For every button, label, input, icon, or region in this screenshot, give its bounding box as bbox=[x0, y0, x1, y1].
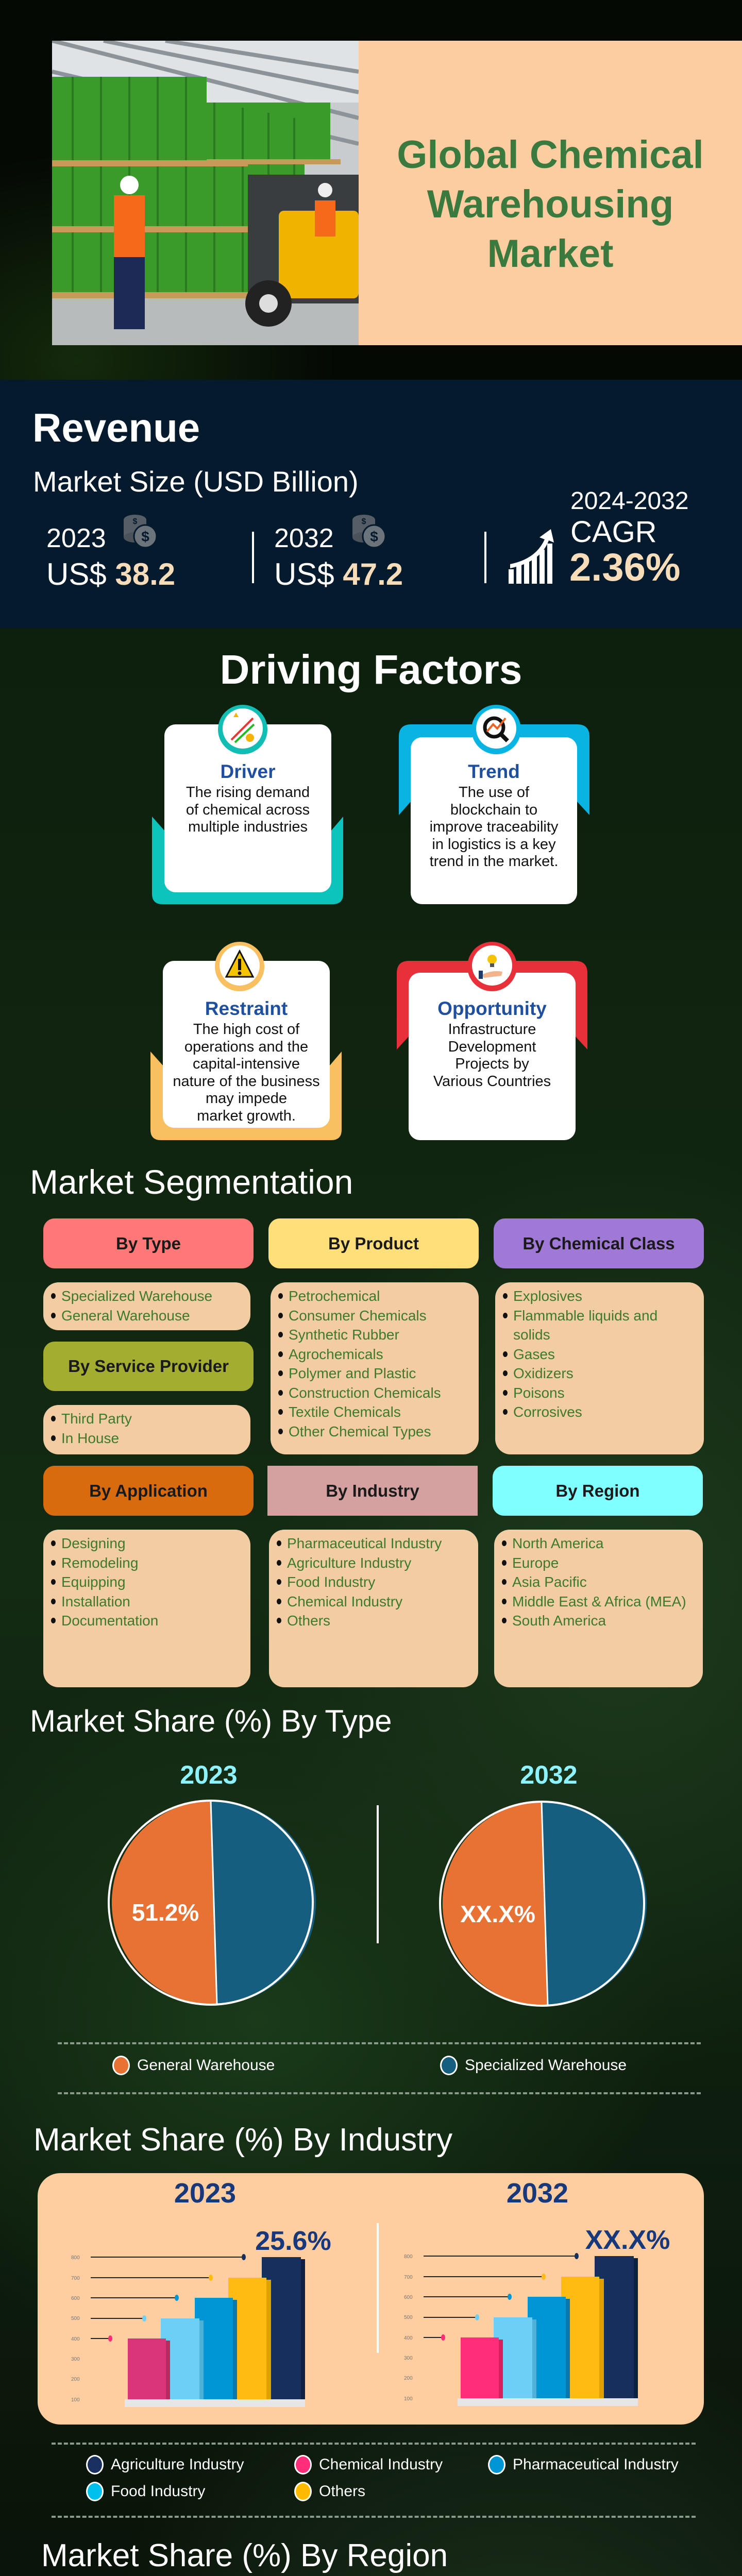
heading: market share by type: Market Share (%) By Type bbox=[30, 1704, 392, 1738]
list: industry bbox=[269, 1530, 478, 1687]
card: trend: trend in the market. bbox=[430, 853, 558, 870]
revenue section bbox=[0, 380, 742, 628]
card: opportunity bbox=[409, 973, 576, 1140]
card: opportunity: Various Countries bbox=[433, 1073, 551, 1089]
card: restraint: operations and the bbox=[184, 1039, 308, 1055]
panel: bar charts by industry: 700 bbox=[71, 2276, 80, 2281]
card: restraint: Restraint bbox=[205, 998, 288, 1019]
chart: pie charts by type: 51.2% bbox=[132, 1899, 199, 1926]
panel: bar charts by industry: 100 bbox=[404, 2396, 413, 2402]
list: application bbox=[43, 1530, 250, 1687]
list: application: Equipping bbox=[61, 1574, 126, 1590]
panel: bar charts by industry: 200 bbox=[404, 2376, 413, 2381]
card: trend: The use of bbox=[459, 784, 529, 801]
icon: coins: $ bbox=[141, 529, 149, 545]
panel: segmentation bbox=[43, 1218, 704, 1687]
list: application: Designing bbox=[61, 1535, 126, 1551]
stat 2023 bbox=[46, 515, 175, 591]
driving factors heading: Driving Factors bbox=[220, 647, 522, 692]
title: Warehousing bbox=[427, 182, 673, 226]
card: driver: The rising demand bbox=[186, 784, 310, 801]
list: product: Polymer and Plastic bbox=[289, 1365, 416, 1381]
card: restraint: may impede bbox=[206, 1090, 287, 1107]
list: chemical class: Gases bbox=[513, 1346, 555, 1362]
card: restraint: market growth. bbox=[197, 1108, 296, 1124]
panel: bar charts by industry: 600 bbox=[404, 2295, 413, 2300]
list: region bbox=[494, 1530, 703, 1687]
panel: bar charts by industry: 500 bbox=[71, 2316, 80, 2321]
icon: coins: $ bbox=[370, 529, 378, 545]
heading: market segmentation: Market Segmentation bbox=[30, 1163, 353, 1201]
title: Market bbox=[487, 232, 613, 276]
header: by service provider bbox=[43, 1342, 254, 1391]
header: by product bbox=[268, 1218, 479, 1268]
heading: market share by industry: Market Share (%) By Industry bbox=[33, 2122, 452, 2158]
list: product: Other Chemical Types bbox=[289, 1423, 431, 1439]
list: type bbox=[43, 1282, 250, 1330]
panel: bar charts by industry bbox=[38, 2173, 704, 2425]
header: by type bbox=[43, 1218, 254, 1268]
panel: bar charts by industry: 2023 bbox=[174, 2178, 236, 2209]
heading: market share by region: Market Share (%) By Region bbox=[41, 2538, 448, 2573]
list: product: Consumer Chemicals bbox=[289, 1308, 427, 1323]
list: region: Middle East & Africa (MEA) bbox=[512, 1593, 686, 1609]
card: trend: Trend bbox=[468, 761, 520, 782]
list: type: Specialized Warehouse bbox=[61, 1288, 212, 1304]
list: chemical class: Flammable liquids and bbox=[513, 1308, 657, 1323]
chart: pie charts by type: 2023 bbox=[180, 1760, 238, 1789]
legend: type: Specialized Warehouse bbox=[465, 2057, 627, 2074]
list: chemical class: solids bbox=[513, 1327, 550, 1343]
list: region: North America bbox=[512, 1535, 603, 1551]
legend: industry: Chemical Industry bbox=[319, 2456, 443, 2473]
card: trend: blockchain to bbox=[450, 802, 537, 818]
header: by chemical class bbox=[494, 1218, 704, 1268]
list: industry: Others bbox=[287, 1613, 330, 1629]
stat 2032: 2032 bbox=[274, 523, 334, 553]
revenue section: CAGR bbox=[570, 515, 657, 549]
panel: bar charts by industry: 700 bbox=[404, 2275, 413, 2280]
panel: bar charts by industry: 300 bbox=[71, 2357, 80, 2362]
list: product bbox=[271, 1282, 479, 1454]
card: driver: of chemical across bbox=[186, 802, 310, 818]
legend: industry: Food Industry bbox=[111, 2483, 205, 2500]
list: industry: Food Industry bbox=[287, 1574, 375, 1590]
list: region: Europe bbox=[512, 1555, 559, 1570]
card: trend: improve traceability bbox=[430, 819, 558, 835]
card: trend: in logistics is a key bbox=[432, 836, 556, 852]
legend: industry bbox=[86, 2455, 679, 2501]
header: by product: By Product bbox=[328, 1233, 419, 1253]
panel: bar charts by industry: 500 bbox=[404, 2315, 413, 2320]
revenue heading: Revenue bbox=[32, 405, 200, 450]
divider bbox=[484, 532, 486, 583]
panel: bar charts by industry: 800 bbox=[404, 2254, 413, 2260]
list: application: Installation bbox=[61, 1593, 130, 1609]
header: by industry bbox=[267, 1466, 478, 1516]
stat 2023: US$ 38.2 bbox=[46, 557, 175, 591]
card: opportunity: Projects by bbox=[455, 1056, 529, 1072]
panel: bar charts by industry: 600 bbox=[71, 2296, 80, 2301]
header: by chemical class: By Chemical Class bbox=[522, 1233, 675, 1253]
title bbox=[397, 133, 704, 276]
revenue section: 2.36% bbox=[569, 546, 680, 589]
header background bbox=[0, 0, 742, 380]
panel: bar charts by industry: 100 bbox=[71, 2397, 80, 2403]
list: chemical class bbox=[495, 1282, 704, 1454]
stat 2023: 2023 bbox=[46, 523, 106, 553]
list: service provider bbox=[43, 1405, 250, 1454]
header photo: warehouse with drums and forklift bbox=[52, 41, 359, 345]
list: product: Synthetic Rubber bbox=[289, 1327, 399, 1343]
legend: type: General Warehouse bbox=[137, 2057, 275, 2074]
list: application: Documentation bbox=[61, 1613, 158, 1629]
icon: opportunity bbox=[468, 942, 516, 991]
icon: coins bbox=[352, 515, 384, 547]
card: opportunity: Opportunity bbox=[437, 998, 547, 1019]
panel: bar charts by industry: 200 bbox=[71, 2377, 80, 2382]
legend: industry: Others bbox=[319, 2483, 365, 2500]
icon: growth arrow bbox=[509, 529, 554, 584]
header: by industry: By Industry bbox=[326, 1481, 419, 1500]
card: restraint: nature of the business bbox=[173, 1073, 320, 1089]
legend: industry: Pharmaceutical Industry bbox=[513, 2456, 679, 2473]
header: by type: By Type bbox=[116, 1233, 181, 1253]
list: industry: Pharmaceutical Industry bbox=[287, 1535, 442, 1551]
panel: bar charts by industry: 25.6% bbox=[255, 2226, 331, 2256]
icon: restraint warning bbox=[215, 942, 264, 991]
icon: coins: $ bbox=[133, 517, 138, 526]
chart: pie charts by type: 2032 bbox=[520, 1760, 578, 1789]
card: opportunity: Development bbox=[448, 1039, 536, 1055]
divider bbox=[252, 532, 254, 583]
list: industry: Chemical Industry bbox=[287, 1593, 402, 1609]
legend: industry: Agriculture Industry bbox=[111, 2456, 244, 2473]
list: application: Remodeling bbox=[61, 1555, 138, 1570]
list: chemical class: Poisons bbox=[513, 1385, 565, 1400]
panel: driving factors card frames bbox=[150, 724, 589, 1140]
icon: trend bbox=[472, 705, 520, 754]
panel: bar charts by industry: XX.X% bbox=[585, 2225, 670, 2255]
card: restraint bbox=[163, 961, 330, 1128]
stat 2032: US$ 47.2 bbox=[274, 557, 403, 591]
panel: bar charts by industry: 800 bbox=[71, 2255, 80, 2261]
CAGR: 2024-2032 bbox=[570, 487, 689, 515]
title: Global Chemical bbox=[397, 133, 704, 177]
list: service provider: In House bbox=[61, 1430, 119, 1446]
header: by region: By Region bbox=[555, 1481, 640, 1500]
icon: coins bbox=[124, 515, 156, 547]
list: region: Asia Pacific bbox=[512, 1574, 587, 1590]
header: by application bbox=[43, 1466, 254, 1516]
card: restraint: The high cost of bbox=[193, 1021, 299, 1038]
card: driver bbox=[164, 724, 331, 892]
list: region: South America bbox=[512, 1613, 606, 1629]
market size label: Market Size (USD Billion) bbox=[33, 465, 359, 498]
panel: bar charts by industry: 400 bbox=[404, 2335, 413, 2341]
card: restraint: capital-intensive bbox=[193, 1056, 300, 1072]
list: product: Construction Chemicals bbox=[289, 1385, 441, 1400]
legend: type bbox=[112, 2056, 627, 2075]
header: by service provider: By Service Provider bbox=[68, 1357, 229, 1376]
icon: driver bbox=[218, 705, 267, 754]
stat 2032 bbox=[274, 515, 403, 591]
card: trend bbox=[411, 737, 577, 904]
card: opportunity: Infrastructure bbox=[448, 1021, 536, 1038]
icon: coins: $ bbox=[362, 517, 366, 526]
list: industry: Agriculture Industry bbox=[287, 1555, 411, 1570]
background: dark green body gradient bbox=[0, 628, 742, 2576]
panel: bar charts by industry: 400 bbox=[71, 2336, 80, 2342]
panel: bar charts by industry: 2032 bbox=[507, 2178, 568, 2209]
header: by application: By Application bbox=[89, 1481, 208, 1500]
header: by region bbox=[493, 1466, 703, 1516]
list: chemical class: Explosives bbox=[513, 1288, 582, 1304]
chart: pie charts by type bbox=[108, 1760, 647, 2007]
list: product: Petrochemical bbox=[289, 1288, 380, 1304]
list: product: Textile Chemicals bbox=[289, 1404, 401, 1420]
card: driver: multiple industries bbox=[188, 819, 308, 835]
list: chemical class: Oxidizers bbox=[513, 1365, 574, 1381]
chart: pie charts by type: XX.X% bbox=[460, 1901, 535, 1927]
list: service provider: Third Party bbox=[61, 1411, 132, 1427]
panel: bar charts by industry: 300 bbox=[404, 2355, 413, 2361]
list: type: General Warehouse bbox=[61, 1308, 190, 1323]
header title panel bbox=[359, 41, 742, 345]
card: driver: Driver bbox=[221, 761, 275, 782]
list: chemical class: Corrosives bbox=[513, 1404, 582, 1420]
list: product: Agrochemicals bbox=[289, 1346, 383, 1362]
